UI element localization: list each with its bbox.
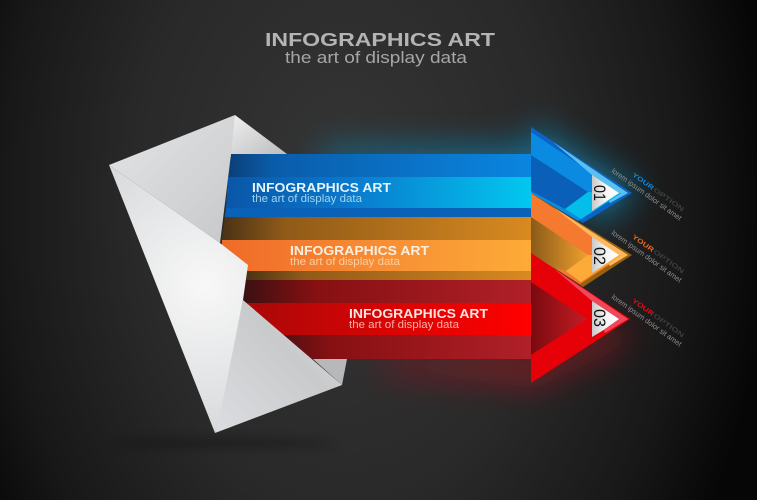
option label 02: lorem ipsum dolor sit amet bbox=[610, 228, 684, 285]
glow: red bbox=[380, 319, 630, 388]
panel: envelope front bbox=[109, 115, 342, 433]
label plate bbox=[592, 301, 619, 337]
band text: red bbox=[349, 307, 488, 331]
option label 02: OPTION bbox=[652, 249, 685, 276]
band text: orange bbox=[290, 244, 429, 268]
option label 01: lorem ipsum dolor sit amet bbox=[610, 166, 684, 223]
label plate bbox=[592, 237, 619, 273]
arrow: red 03 bbox=[531, 253, 630, 383]
option label 01: OPTION bbox=[652, 187, 685, 214]
band text: orange: INFOGRAPHICS ART bbox=[290, 244, 429, 258]
number 02: 02 bbox=[590, 247, 609, 265]
subtitle: the art of display data bbox=[285, 48, 468, 67]
arrow: orange 02 bbox=[531, 193, 632, 287]
band: orange bbox=[222, 217, 532, 280]
band text: red: the art of display data bbox=[349, 319, 460, 331]
envelope ground shadow bbox=[115, 439, 335, 447]
option label 03: YOUR bbox=[631, 298, 655, 318]
glow: blue bbox=[320, 122, 640, 226]
label plate bbox=[592, 175, 619, 211]
option label 02: YOUR bbox=[631, 234, 655, 254]
band text: red: INFOGRAPHICS ART bbox=[349, 307, 488, 321]
option label 03: lorem ipsum dolor sit amet bbox=[610, 292, 684, 349]
number 03: 03 bbox=[590, 309, 609, 327]
option label 03: OPTION bbox=[652, 313, 685, 340]
top flap bbox=[109, 115, 235, 243]
band text: blue bbox=[252, 181, 391, 205]
panel: ribbon bands bbox=[222, 154, 532, 359]
band text: blue: INFOGRAPHICS ART bbox=[252, 181, 391, 195]
option label 01: YOUR bbox=[631, 172, 655, 192]
lower right fold bbox=[215, 300, 342, 433]
panel: envelope back pieces bbox=[225, 115, 347, 385]
left front bbox=[109, 165, 248, 433]
number 01: 01 bbox=[590, 185, 609, 201]
arrow: blue 01 bbox=[531, 127, 632, 223]
title: INFOGRAPHICS ART bbox=[265, 30, 495, 50]
band: blue bbox=[225, 154, 532, 217]
band text: blue: the art of display data bbox=[252, 193, 363, 205]
band: red bbox=[243, 280, 532, 359]
band text: orange: the art of display data bbox=[290, 256, 401, 268]
